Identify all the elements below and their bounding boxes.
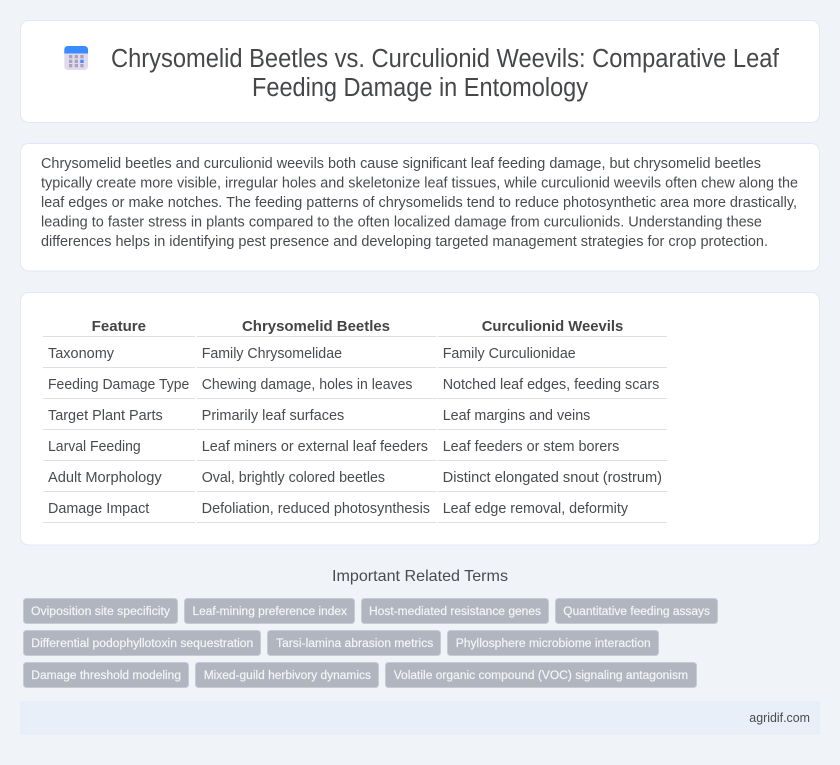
table row: taxonomy: Family Chrysomelidae [202, 346, 342, 362]
footer [20, 701, 820, 735]
table row: larval feeding: Larval Feeding [48, 439, 141, 455]
table row: larval feeding [48, 439, 619, 455]
heading: important related terms: Important Related Terms [332, 568, 508, 585]
tag: Host-mediated resistance genes [369, 604, 541, 618]
table row: taxonomy: Taxonomy [48, 346, 115, 362]
related term tags [24, 598, 718, 688]
table header [92, 318, 623, 335]
table row: feeding damage type [48, 377, 659, 393]
table row: taxonomy [48, 346, 576, 362]
summary paragraph [41, 156, 798, 250]
title: Chrysomelid Beetles vs. Curculionid Weevils: Comparative Leaf [111, 45, 780, 73]
panel: title header [20, 20, 820, 122]
table row: target plant parts: Target Plant Parts [48, 408, 163, 424]
tag: Leaf-mining preference index [192, 604, 348, 618]
tag [24, 662, 188, 688]
tag [196, 662, 378, 688]
tag [448, 630, 658, 656]
footer: agridif.com [749, 710, 810, 725]
tag [386, 662, 696, 688]
table row: larval feeding: Leaf feeders or stem borers [443, 439, 619, 455]
title: Feeding Damage in Entomology [252, 74, 588, 102]
tag [362, 598, 548, 624]
table row: damage impact: Defoliation, reduced photosynthesis [202, 501, 430, 517]
table row: taxonomy: Family Curculionidae [443, 346, 576, 362]
icon: calendar [64, 46, 88, 70]
tag: Tarsi-lamina abrasion metrics [276, 636, 433, 650]
summary paragraph: Chrysomelid beetles and curculionid weevils both cause significant leaf feeding damage, but chrysomelid beetles [41, 156, 761, 172]
table row: damage impact [48, 501, 629, 517]
table header: Curculionid Weevils [482, 318, 623, 335]
table row: adult morphology [48, 470, 662, 486]
panel: comparison table [20, 292, 820, 545]
table row: damage impact: Damage Impact [48, 501, 149, 517]
tag: Phyllosphere microbiome interaction [456, 636, 651, 650]
tag [268, 630, 440, 656]
tag: Oviposition site specificity [31, 604, 171, 618]
tag: Quantitative feeding assays [563, 604, 710, 618]
summary paragraph: differences helps in identifying pest presence and developing targeted management strategies for crop protection. [41, 234, 768, 250]
tag [556, 598, 718, 624]
table row: damage impact: Leaf edge removal, deformity [443, 501, 629, 517]
tag: Damage threshold modeling [31, 668, 181, 682]
summary paragraph: leaf edges or make notches. The feeding patterns of chrysomelids tend to reduce photosynthetic area more drastically, [41, 195, 797, 211]
table row: target plant parts [48, 408, 590, 424]
table row: feeding damage type: Chewing damage, holes in leaves [202, 377, 412, 393]
table row: target plant parts: Leaf margins and veins [443, 408, 590, 424]
table row: feeding damage type: Notched leaf edges, feeding scars [443, 377, 659, 393]
panel: summary [20, 144, 820, 271]
tag: Mixed-guild herbivory dynamics [204, 668, 371, 682]
tag: Differential podophyllotoxin sequestration [31, 636, 253, 650]
table row: adult morphology: Adult Morphology [48, 470, 163, 486]
title [111, 45, 780, 102]
summary paragraph: leading to faster stress in plants compared to the often localized damage from curculionids. Understanding these [41, 214, 762, 230]
table header: Feature [92, 318, 146, 335]
table row: feeding damage type: Feeding Damage Type [48, 377, 189, 393]
table row: adult morphology: Oval, brightly colored beetles [202, 470, 385, 486]
summary paragraph: typically create more visible, irregular holes and skeletonize leaf tissues, while curculionid weevils often chew along the [41, 176, 798, 192]
tag [24, 630, 260, 656]
table row: target plant parts: Primarily leaf surfaces [202, 408, 344, 424]
tag [184, 598, 354, 624]
tag: Volatile organic compound (VOC) signaling antagonism [394, 668, 688, 682]
table row: adult morphology: Distinct elongated snout (rostrum) [443, 470, 662, 486]
table row: larval feeding: Leaf miners or external leaf feeders [202, 439, 428, 455]
table header: Chrysomelid Beetles [242, 318, 390, 335]
tag [24, 598, 178, 624]
